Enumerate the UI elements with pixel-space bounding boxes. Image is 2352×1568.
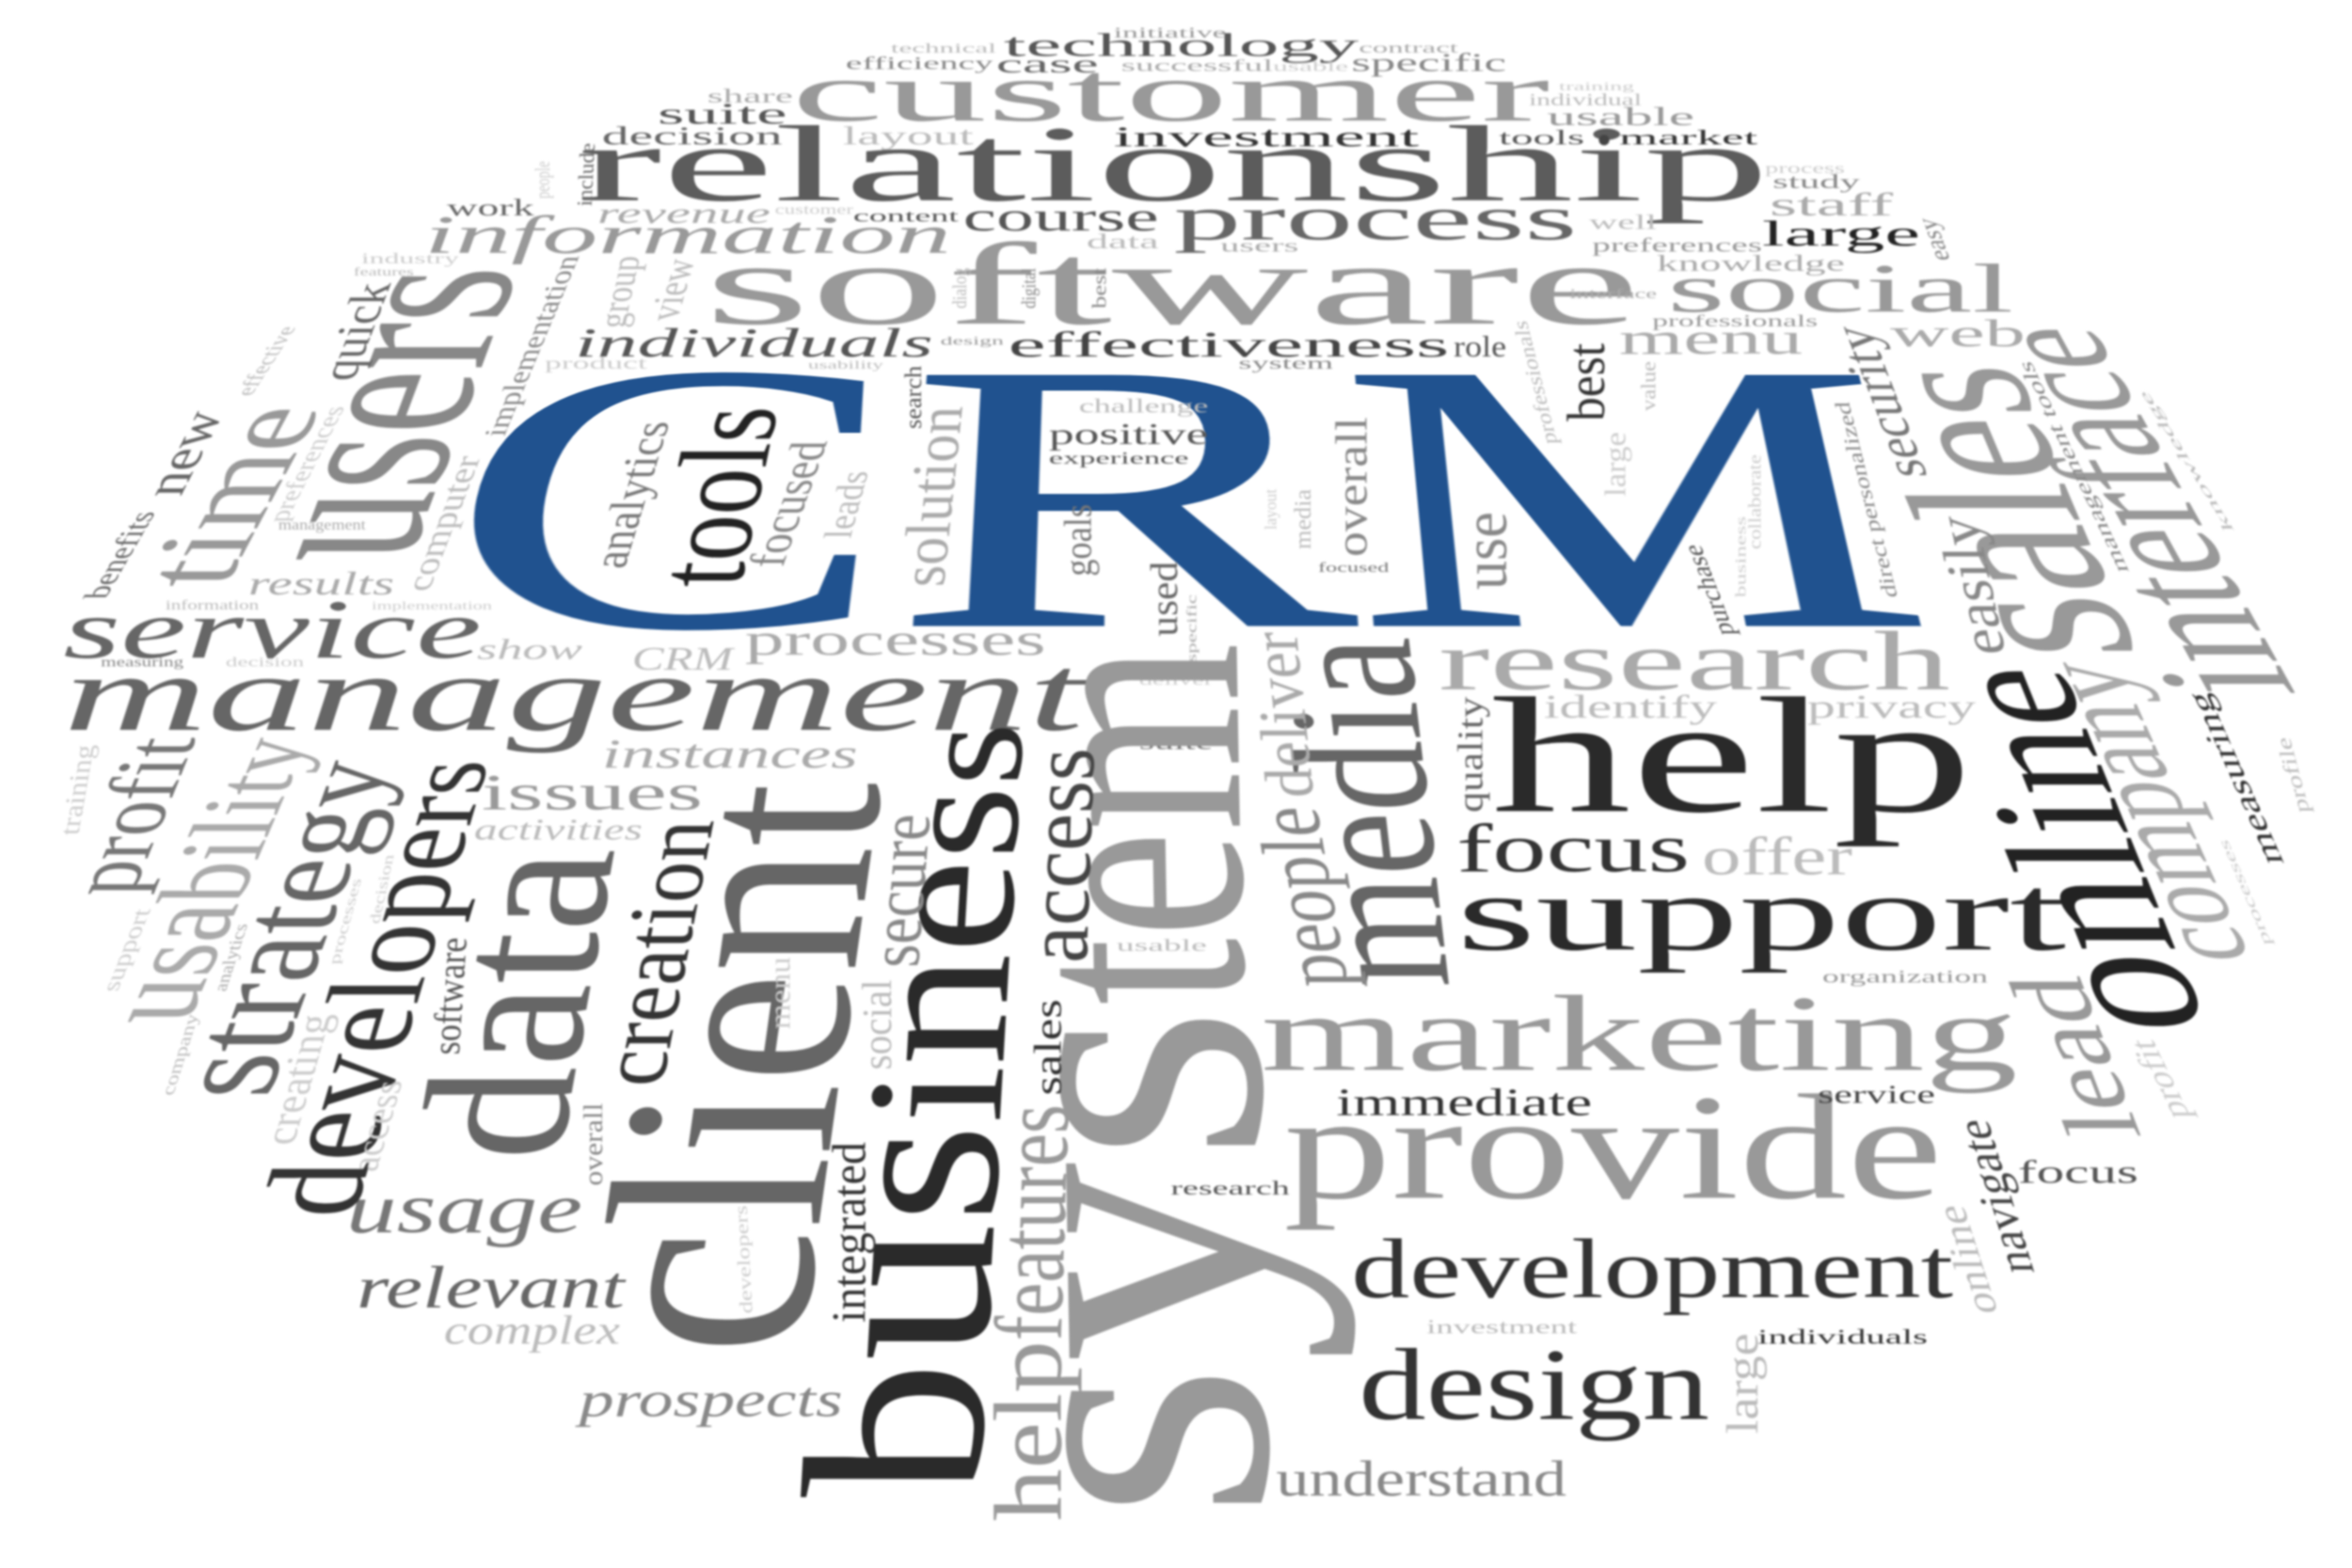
small rotated words: view (640, 259, 704, 321)
word: users (rotated): users (189, 266, 574, 562)
word: business (rotated): business (748, 722, 1079, 1497)
word: software: software (705, 219, 1640, 349)
title: CRM: M (1322, 329, 2074, 699)
small rotated words: value (1636, 361, 1660, 411)
small horizontal words: privacy (1807, 689, 1977, 725)
word: company (rotated): company (2011, 662, 2278, 961)
word: people (rotated): people (1236, 806, 1368, 987)
small horizontal words: training (1559, 80, 1635, 93)
small rotated words: support (96, 909, 156, 991)
word: data (rotated): data (373, 848, 660, 1160)
word: management: management (63, 633, 1089, 753)
small horizontal words: process (1765, 161, 1845, 177)
small rotated words: media (1289, 489, 1316, 549)
small horizontal words: study (1772, 171, 1861, 193)
small rotated words: quality (1451, 696, 1490, 813)
small horizontal words: specific (1351, 48, 1506, 76)
word: customer: customer (791, 46, 1550, 139)
small rotated words: people (531, 161, 554, 198)
small horizontal words: research (1170, 1178, 1291, 1199)
word: access (rotated): access (1006, 748, 1114, 963)
word: support: support (1456, 852, 2066, 973)
small rotated words: profile (2271, 737, 2314, 813)
word: processes: processes (745, 615, 1046, 665)
small rotated words: sales (1026, 999, 1070, 1096)
small rotated words: specific (1185, 594, 1200, 662)
small horizontal words: market (1619, 126, 1759, 150)
small horizontal words: design (941, 334, 1005, 347)
small rotated words: computer (397, 456, 489, 592)
small rotated words: used (1142, 562, 1185, 637)
small rotated words: group (591, 256, 649, 328)
word: immediate: immediate (1336, 1080, 1592, 1123)
small rotated words: goals (1057, 504, 1100, 577)
word: usage: usage (346, 1170, 582, 1248)
word: online (rotated): online (1874, 667, 2255, 1032)
small rotated words: online (1926, 1205, 2008, 1314)
small rotated words: use (1450, 512, 1520, 590)
small horizontal words: system (1238, 354, 1334, 372)
word: system (rotated) (880, 642, 1359, 1520)
word: social: social (1667, 249, 2013, 326)
word: technology: technology (1004, 26, 1359, 63)
small horizontal words: contract (1359, 40, 1459, 56)
small horizontal words: knowledge (1657, 252, 1845, 277)
small horizontal words: service (1818, 1081, 1935, 1109)
small rotated words: creating (253, 1014, 342, 1145)
small rotated words: include (573, 143, 599, 206)
small rotated words: access (342, 1081, 412, 1172)
small rotated words: processes (326, 879, 365, 964)
small rotated words: management tools (2013, 361, 2135, 572)
word: instances: instances (602, 733, 858, 777)
small rotated words: easily (1922, 515, 2019, 655)
word: focus: focus (1456, 809, 1690, 886)
small horizontal words: work (447, 194, 534, 221)
small rotated words: search (899, 366, 927, 429)
small horizontal words: web (1890, 311, 2026, 355)
small horizontal words: investment (1426, 1316, 1578, 1338)
word: process: process (1174, 182, 1577, 253)
word: usability (rotated): usability (70, 737, 339, 1023)
small rotated words: social (853, 979, 900, 1069)
word: help: help (1491, 664, 1973, 847)
small rotated words: purchase (1677, 545, 1741, 635)
small horizontal words: industry (361, 251, 459, 267)
small horizontal words: case (996, 50, 1099, 78)
small horizontal words: show (477, 634, 583, 666)
small horizontal words: experience (1049, 449, 1189, 467)
small horizontal words: well (1589, 210, 1657, 233)
small horizontal words: professionals (1652, 311, 1818, 330)
small rotated words: company (157, 1014, 203, 1096)
small horizontal words: implementation (372, 599, 493, 612)
small horizontal words: tools (1499, 126, 1584, 150)
small rotated words: digital (1018, 268, 1040, 309)
word: solution (rotated): solution (887, 406, 977, 587)
small rotated words: direct personalized (1830, 401, 1902, 597)
small horizontal words: usability (808, 358, 884, 372)
word: time (rotated): time (113, 406, 350, 587)
small rotated words: menu (764, 957, 797, 1029)
word: help (rotated): help (977, 1340, 1083, 1521)
word: sales (rotated): sales (1784, 364, 2195, 657)
small horizontal words: content (853, 206, 959, 225)
word: interface (rotated): interface (1926, 326, 2338, 695)
small rotated words: focused (738, 441, 839, 567)
word: individuals: individuals (575, 322, 933, 366)
small rotated words: best (1557, 343, 1616, 421)
small rotated words: analytics (210, 924, 252, 991)
word: prospects: prospects (574, 1372, 843, 1427)
word: system (rotated): tem (949, 642, 1313, 1006)
small horizontal words: positive (1049, 418, 1208, 451)
small horizontal words: initiative (1114, 25, 1227, 41)
small horizontal words: role (1454, 330, 1506, 363)
word: activities: activities (474, 814, 643, 847)
small horizontal words: share (707, 86, 793, 107)
small horizontal words: interface (1569, 287, 1657, 302)
small rotated words: profit (2121, 1039, 2199, 1118)
word: effectiveness: effectiveness (1009, 325, 1449, 365)
small horizontal words: investment (1114, 120, 1421, 152)
small horizontal words: features (354, 265, 414, 278)
word: information: information (424, 206, 951, 265)
title: CRM: C (388, 329, 1022, 699)
small horizontal words: organization (1822, 968, 1989, 988)
small horizontal words: suite (658, 97, 787, 130)
small rotated words: professionals (1508, 321, 1562, 444)
small rotated words: preferences (262, 406, 351, 522)
small rotated words: security (1819, 326, 1940, 477)
small horizontal words: suite (1139, 731, 1213, 754)
small horizontal words: management (278, 517, 366, 533)
word: relevant: relevant (357, 1254, 628, 1321)
small rotated words: dialog (949, 268, 971, 309)
small horizontal words: information (166, 598, 259, 613)
small rotated words: leads (816, 471, 878, 539)
small rotated words: navigate (1946, 1119, 2045, 1273)
small horizontal words: successful (1121, 55, 1273, 74)
small rotated words: knowledge (2133, 391, 2238, 531)
small rotated words: implementation (478, 256, 587, 436)
small rotated words: software (425, 938, 476, 1054)
small horizontal words: large (1762, 214, 1920, 254)
small rotated words: large (1718, 1333, 1768, 1433)
small horizontal words: menu (1619, 314, 1803, 364)
word: secure (rotated): secure (853, 814, 946, 968)
small rotated words: processes (2214, 840, 2276, 945)
word: research: research (1438, 615, 1950, 708)
small horizontal words: customer (775, 202, 853, 217)
word: media (rotated): media (1242, 637, 1490, 987)
small horizontal words: challenge (1079, 395, 1208, 417)
word: deliver (rotated): deliver (1236, 632, 1328, 798)
small rotated words: decision (367, 855, 398, 924)
word: client (rotated): client (501, 782, 955, 1355)
word: relationship: relationship (578, 103, 1770, 224)
small horizontal words: efficiency (846, 55, 993, 74)
small horizontal words: layout (843, 122, 975, 150)
small rotated words: benefits (76, 512, 164, 599)
word: creation (rotated): creation (578, 820, 736, 1086)
small rotated words: best (1089, 268, 1111, 309)
word: system (rotated): sys (880, 1006, 1359, 1520)
small horizontal words: preferences (1592, 234, 1762, 256)
small rotated words: developers (732, 1205, 757, 1314)
word: design: design (1359, 1327, 1709, 1441)
word: tools (rotated): tools (628, 406, 806, 587)
small horizontal words: revenue (597, 198, 771, 230)
small rotated words: overall (1327, 417, 1376, 557)
word: understand: understand (1276, 1450, 1566, 1507)
small horizontal words (101, 25, 2138, 1349)
small horizontal words: usable (1117, 936, 1207, 955)
small rotated words: overall (579, 1103, 609, 1186)
small rotated words: new (129, 411, 237, 497)
small rotated words: layout (1261, 489, 1279, 530)
small horizontal words: focused (1318, 561, 1391, 576)
small rotated words: measuring (2178, 692, 2292, 863)
small rotated words: collaborate (1745, 454, 1765, 549)
title: CRM: R (855, 329, 1496, 699)
small horizontal words: deliver (1139, 673, 1214, 689)
small horizontal words: product (545, 354, 647, 372)
word: development: development (1351, 1223, 1953, 1316)
small horizontal words: individual (1529, 90, 1642, 109)
word: provide: provide (1283, 1063, 1943, 1230)
small rotated words: large (1598, 432, 1631, 497)
small rotated words (55, 143, 2314, 1433)
small horizontal words: staff (1770, 186, 1894, 223)
small rotated words: analytics (582, 421, 680, 569)
small horizontal words: course (963, 196, 1159, 240)
small horizontal words: measuring (101, 656, 183, 671)
small horizontal words: technical (891, 41, 996, 56)
word: complex: complex (444, 1309, 620, 1354)
word: strategy (rotated): strategy (134, 760, 424, 1099)
small horizontal words: focus (2018, 1153, 2138, 1190)
small horizontal words: usable (1273, 59, 1348, 74)
small rotated words: training (55, 745, 101, 835)
word: profit (rotated): profit (46, 737, 218, 895)
small horizontal words: identify (1544, 689, 1718, 725)
small horizontal words: decision (602, 122, 784, 150)
word: issues: issues (482, 765, 703, 821)
small rotated words: effective (230, 326, 302, 396)
word: marketing: marketing (1261, 973, 2018, 1093)
small horizontal words: users (1220, 236, 1298, 256)
word: service: service (63, 583, 482, 676)
small rotated words: business (1733, 516, 1749, 597)
title: CRM (388, 329, 2074, 699)
small rotated words: quick (310, 282, 404, 381)
small rotated words: integrated (823, 1142, 877, 1323)
word: offer: offer (1702, 827, 1852, 886)
small horizontal words: results (248, 565, 394, 602)
small rotated words: easy (1912, 218, 1957, 261)
word: features (rotated): features (977, 1104, 1090, 1340)
small horizontal words: individuals (1757, 1325, 1928, 1349)
small horizontal words: data (1087, 230, 1159, 253)
word: developers (rotated): developers (227, 760, 520, 1217)
small horizontal words: CRM (632, 641, 735, 677)
word: lead (rotated): lead (1986, 975, 2165, 1137)
small horizontal words: usable (1547, 103, 1694, 131)
small horizontal words: decision (226, 656, 304, 671)
